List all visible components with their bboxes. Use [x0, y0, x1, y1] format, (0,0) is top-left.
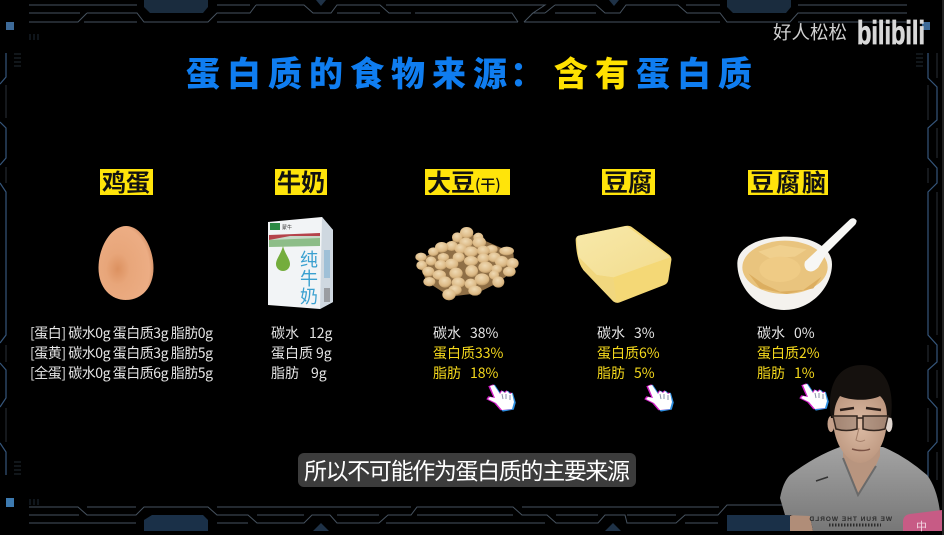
text: milk nutrition [271, 323, 333, 383]
icon: milk carton: 纯 [300, 246, 318, 272]
right decorative frame [916, 53, 937, 480]
icon: pink input badge [903, 510, 942, 534]
subtitle caption: 所以不可能作为蛋白质的主要来源 [304, 452, 630, 486]
text: milk nutrition: 9g [316, 343, 332, 363]
icon: milk carton: 蒙牛 [282, 224, 292, 231]
text: tofu pudding nutrition: 1% [794, 363, 815, 383]
left decorative frame [0, 53, 21, 475]
text: tofu pudding nutrition [757, 323, 820, 383]
text: soybean nutrition: 18% [470, 363, 499, 383]
icon: pink input badge: 中 [916, 518, 927, 534]
icon: milk carton [268, 217, 333, 309]
text: milk nutrition: 12g [309, 323, 333, 343]
text: tofu nutrition: 蛋白质 [597, 343, 639, 363]
title: ： [510, 47, 544, 96]
icon: tofu block [576, 226, 671, 303]
text: tofu nutrition: 脂肪 [597, 363, 625, 383]
text: tofu nutrition: 碳水 [597, 323, 625, 343]
heading: milk: 牛奶 [277, 163, 325, 198]
logo: uploader and bilibili watermark [773, 14, 925, 51]
text: egg nutrition: [全蛋] 碳水0g 蛋白质6g 脂肪5g [30, 363, 213, 383]
heading: dried soybeans: (干) [475, 174, 501, 195]
text: tofu pudding nutrition: 2% [799, 343, 820, 363]
text: tofu pudding nutrition: 0% [794, 323, 815, 343]
text: tofu nutrition [597, 323, 660, 383]
logo: uploader and bilibili watermark: 好人松松 [773, 19, 847, 45]
presenter video overlay [780, 365, 940, 531]
text: milk nutrition: 碳水 [271, 323, 299, 343]
text: tofu nutrition: 6% [639, 343, 660, 363]
icon: egg [98, 226, 154, 300]
text: soybean nutrition: 蛋白质 [433, 343, 475, 363]
text: soybean nutrition: 33% [475, 343, 504, 363]
heading: egg: 鸡蛋 [102, 163, 150, 198]
title: 含有 [554, 47, 636, 96]
icon: soybeans pile [415, 227, 519, 300]
text: tofu pudding nutrition: 碳水 [757, 323, 785, 343]
heading: dried soybeans [425, 163, 510, 198]
icon: pointer hand soybeans [486, 384, 516, 412]
text: milk nutrition: 脂肪 [271, 363, 299, 383]
text: soybean nutrition [433, 323, 504, 383]
text: soybean nutrition: 脂肪 [433, 363, 461, 383]
bottom decorative frame [6, 498, 790, 531]
icon: tofu pudding bowl with spoon [737, 218, 857, 310]
heading: tofu: 豆腐 [604, 163, 652, 198]
text: milk nutrition: 蛋白质 [271, 343, 313, 363]
title: 蛋白质 [636, 47, 759, 96]
text: egg nutrition: [蛋白] 碳水0g 蛋白质3g 脂肪0g [30, 323, 213, 343]
text: soybean nutrition: 碳水 [433, 323, 461, 343]
icon: pointer hand tofu [644, 384, 674, 412]
heading: dried soybeans: 大豆 [427, 163, 475, 198]
icon: pointer hand tofu pudding [799, 383, 829, 411]
text: tofu nutrition: 3% [634, 323, 655, 343]
heading: tofu pudding: 豆腐脑 [750, 163, 826, 198]
text: tofu pudding nutrition: 蛋白质 [757, 343, 799, 363]
top decorative frame [6, 0, 930, 40]
presenter video overlay: WE RUN THE WORLD [808, 516, 892, 523]
title: 蛋白质的食物来源 [186, 47, 514, 96]
text: egg nutrition [30, 323, 213, 383]
text: milk nutrition: 9g [311, 363, 327, 383]
title [186, 47, 759, 96]
text: egg nutrition: [蛋黄] 碳水0g 蛋白质3g 脂肪5g [30, 343, 213, 363]
text: tofu pudding nutrition: 脂肪 [757, 363, 785, 383]
text: soybean nutrition: 38% [470, 323, 499, 343]
icon: milk carton: 牛 [300, 265, 318, 291]
text: tofu nutrition: 5% [634, 363, 655, 383]
icon: milk carton: 奶 [300, 283, 318, 309]
